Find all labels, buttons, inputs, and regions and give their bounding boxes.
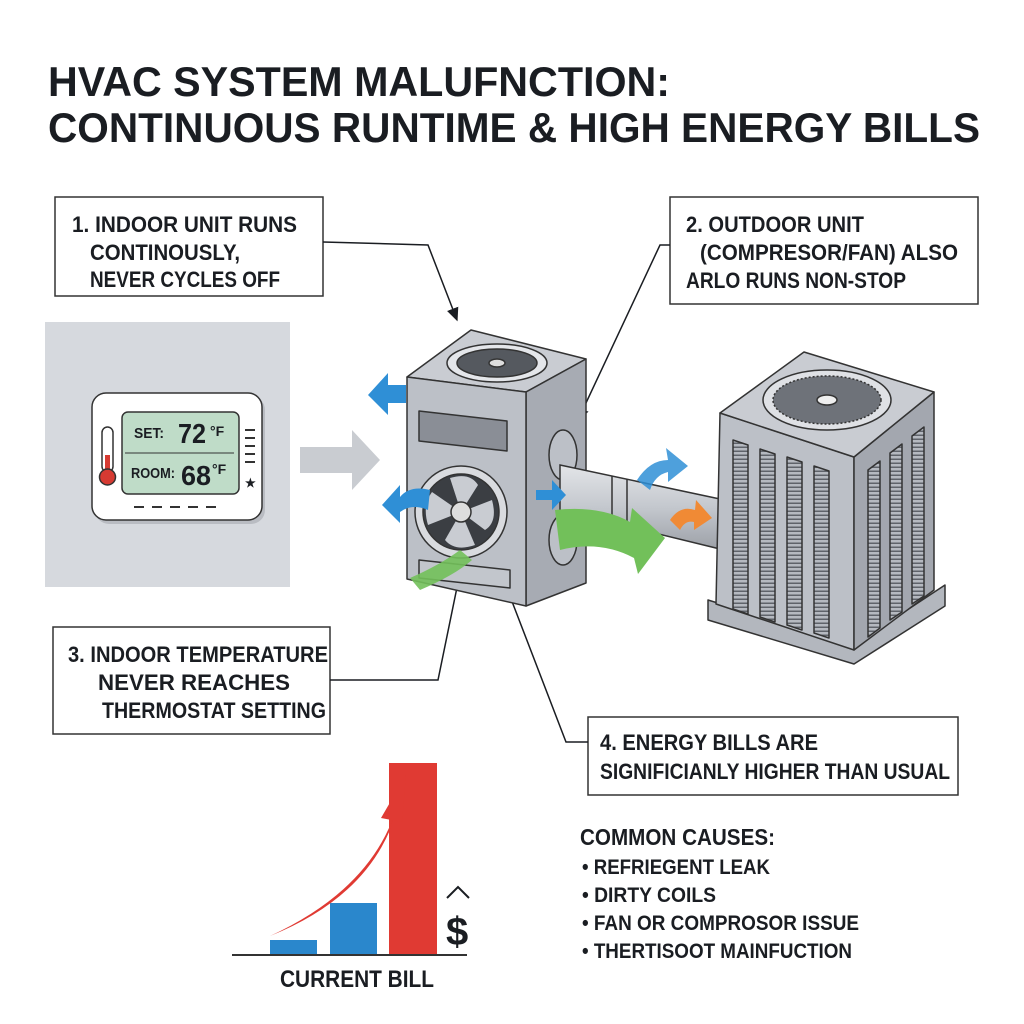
thermostat: ★ (245, 476, 256, 490)
thermostat: ROOM: (131, 465, 175, 482)
leader lines (323, 242, 670, 742)
callout 3: 3. INDOOR TEMPERATURE (68, 642, 328, 667)
bar chart: CURRENT BILL (280, 966, 434, 993)
title: CONTINUOUS RUNTIME & HIGH ENERGY BILLS (48, 104, 980, 151)
title (48, 58, 980, 151)
callout 3 (53, 627, 330, 734)
callout 2: 2. OUTDOOR UNIT (686, 212, 865, 237)
common causes (580, 824, 859, 963)
airflow arrows (368, 373, 712, 590)
bar chart: $ (446, 910, 468, 954)
icon: thermometer (100, 427, 116, 485)
bar chart (232, 763, 469, 993)
callout 1: CONTINOUSLY, (90, 240, 240, 265)
title: HVAC SYSTEM MALUFNCTION: (48, 58, 670, 105)
callout 4 (588, 717, 958, 795)
thermostat (92, 393, 265, 524)
callout 1: NEVER CYCLES OFF (90, 267, 280, 292)
callout 4: 4. ENERGY BILLS ARE (600, 730, 818, 755)
indoor unit (407, 330, 586, 606)
pipe (560, 465, 720, 549)
thermostat: SET: (134, 425, 164, 442)
thermostat: °F (210, 423, 225, 439)
callout 2: ARLO RUNS NON-STOP (686, 268, 906, 293)
callout 3: NEVER REACHES (98, 670, 290, 695)
callout 1 (55, 197, 323, 296)
callout 3: THERMOSTAT SETTING (102, 698, 326, 723)
outdoor unit (708, 352, 945, 664)
callout 2: (COMPRESOR/FAN) ALSO (700, 240, 958, 265)
panel: thermostat wall (45, 322, 290, 587)
thermostat: 68 (181, 460, 211, 491)
thermostat: °F (212, 461, 227, 477)
common causes: • DIRTY COILS (582, 884, 716, 907)
callout 4: SIGNIFICIANLY HIGHER THAN USUAL (600, 759, 950, 784)
common causes: • FAN OR COMPROSOR ISSUE (582, 912, 859, 935)
arrow: gray (300, 430, 380, 490)
callout 1: 1. INDOOR UNIT RUNS (72, 212, 297, 237)
thermostat: 72 (178, 418, 206, 449)
common causes: COMMON CAUSES: (580, 824, 775, 850)
callout 2 (670, 197, 978, 304)
common causes: • REFRIEGENT LEAK (582, 856, 770, 879)
common causes: • THERTISOOT MAINFUCTION (582, 940, 852, 963)
